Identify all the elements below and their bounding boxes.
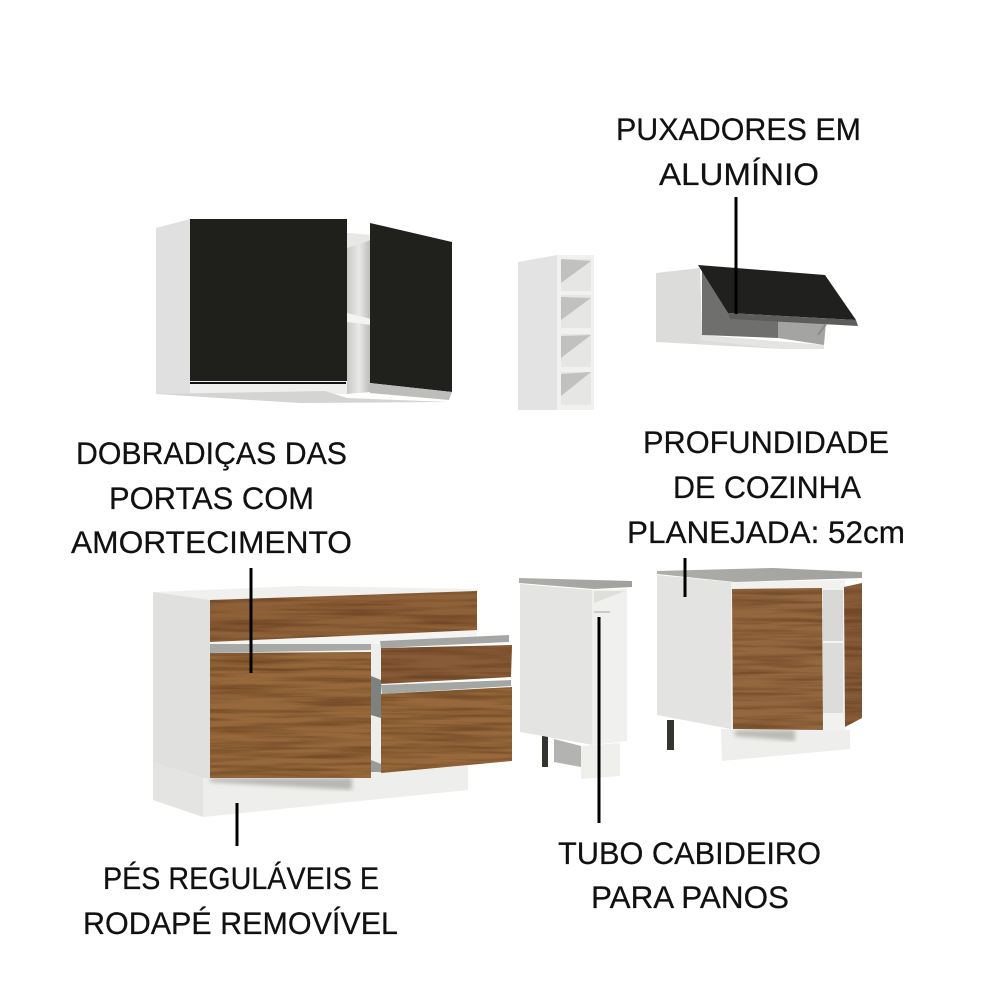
label: towel rail: TUBO CABIDEIRO bbox=[558, 835, 821, 871]
corner base cabinet bbox=[657, 568, 862, 761]
middle drawer front bbox=[381, 645, 512, 684]
upper cabinet with flip-up door bbox=[656, 265, 858, 349]
narrow base cabinet with towel rail bbox=[519, 578, 632, 779]
pointer: kitchen depth bbox=[684, 558, 686, 597]
label: aluminium handles bbox=[616, 111, 861, 192]
narrow open shelf column bbox=[518, 255, 594, 410]
corner right door front bbox=[844, 583, 862, 727]
label: adjustable feet: PÉS REGULÁVEIS E bbox=[103, 860, 379, 896]
label: door hinges: PORTAS COM bbox=[109, 480, 314, 516]
pointer: adjustable feet bbox=[236, 803, 238, 846]
label: towel rail: PARA PANOS bbox=[591, 879, 789, 915]
label: adjustable feet: RODAPÉ REMOVÍVEL bbox=[83, 905, 398, 941]
left door front bbox=[210, 652, 371, 778]
label: door hinges bbox=[71, 435, 352, 560]
pointer: aluminium handles bbox=[734, 197, 738, 314]
corner left door front bbox=[732, 588, 823, 730]
lower drawer front bbox=[381, 687, 512, 773]
pointer: door hinges bbox=[250, 568, 252, 673]
label: kitchen depth: PROFUNDIDADE bbox=[643, 424, 889, 460]
label: kitchen depth: DE COZINHA bbox=[673, 469, 861, 505]
label: door hinges: DOBRADIÇAS DAS bbox=[76, 435, 347, 471]
label: adjustable feet bbox=[83, 860, 398, 941]
upper cabinet with two black doors bbox=[156, 219, 452, 403]
label: aluminium handles: ALUMÍNIO bbox=[659, 156, 819, 192]
label: door hinges: AMORTECIMENTO bbox=[71, 524, 352, 560]
label: kitchen depth: PLANEJADA: 52cm bbox=[627, 514, 905, 550]
label: aluminium handles: PUXADORES EM bbox=[616, 111, 861, 147]
pointer: towel rail bbox=[598, 617, 600, 823]
top drawer front bbox=[210, 591, 477, 642]
label: towel rail bbox=[558, 835, 821, 915]
base cabinet with door and drawers bbox=[153, 586, 512, 817]
label: kitchen depth bbox=[627, 424, 905, 550]
